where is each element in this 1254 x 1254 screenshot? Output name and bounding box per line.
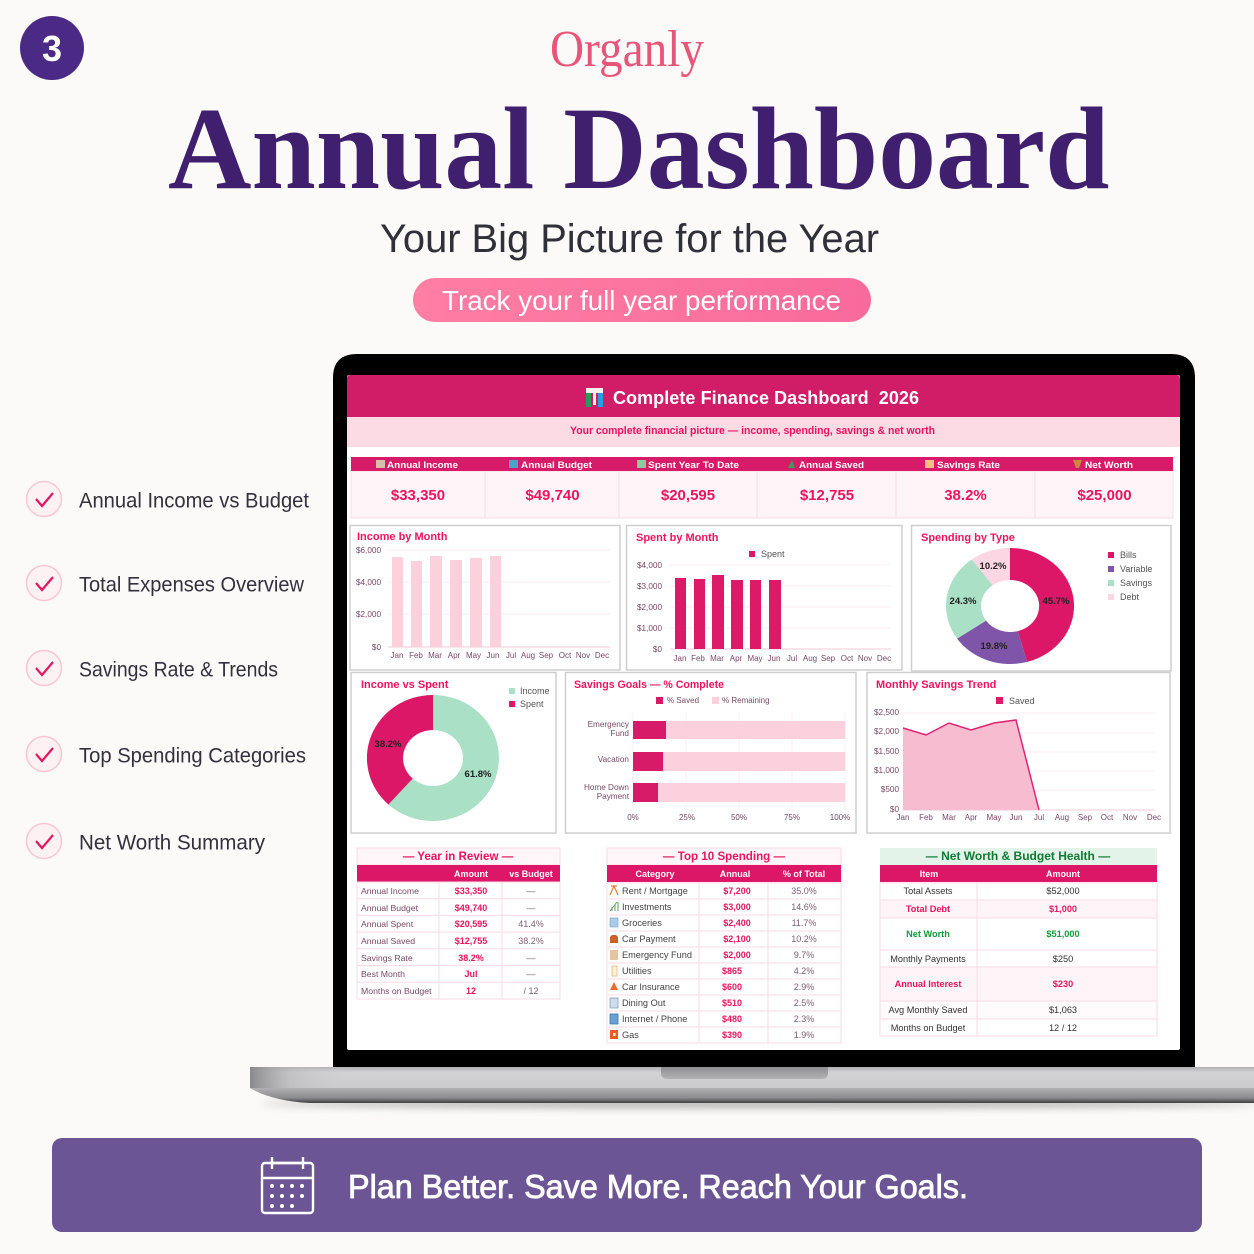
axis labels: Aug <box>803 654 817 663</box>
tagline pill <box>413 278 871 322</box>
laptop <box>250 354 1254 1108</box>
axis labels: $6,000 <box>356 546 381 555</box>
axis labels: Dec <box>1147 813 1161 822</box>
axis labels: Home Down <box>584 783 629 792</box>
table: net worth and budget health: Monthly Payments <box>890 954 966 964</box>
table: year in review: Best Month <box>361 969 405 979</box>
table: net worth and budget health: $52,000 <box>1046 886 1080 896</box>
table: top 10 spending <box>607 848 841 1043</box>
table: top 10 spending: $2,000 <box>723 950 751 960</box>
legend: Spent <box>520 699 544 709</box>
axis labels: Sep <box>539 651 554 660</box>
table: year in review: 12 <box>466 986 476 996</box>
panel: monthly savings trend: Monthly Savings Trend <box>876 679 996 691</box>
axis labels: $3,000 <box>637 582 662 591</box>
axis labels: Jan <box>897 813 909 822</box>
legend: Bills <box>1120 550 1137 560</box>
table: top 10 spending: 10.2% <box>791 934 817 944</box>
axis labels: $0 <box>653 645 662 654</box>
step number badge: 3 <box>42 28 62 69</box>
donut chart <box>367 695 499 821</box>
laptop base <box>250 1067 1254 1103</box>
table: top 10 spending: — Top 10 Spending — <box>663 850 785 863</box>
feature: net worth summary: Net Worth Summary <box>79 830 265 854</box>
table: top 10 spending: Internet / Phone <box>622 1014 687 1024</box>
table: year in review: — <box>526 953 536 963</box>
table: net worth and budget health: $1,063 <box>1049 1005 1077 1015</box>
KPI: annual budget: $49,740 <box>525 487 580 504</box>
axis labels: May <box>747 654 763 663</box>
axis labels: Nov <box>1123 813 1137 822</box>
axis labels: Jun <box>487 651 499 660</box>
table: top 10 spending: Gas <box>622 1030 639 1040</box>
legend <box>656 696 770 705</box>
legend <box>1108 550 1153 602</box>
table: year in review: Annual Saved <box>361 936 415 946</box>
panel: income by month <box>350 526 620 670</box>
table: top 10 spending: Car Insurance <box>622 982 680 992</box>
table: year in review: vs Budget <box>509 869 553 879</box>
table: net worth and budget health: $230 <box>1053 979 1073 989</box>
axis labels: Jan <box>391 651 403 660</box>
table: top 10 spending: Rent / Mortgage <box>622 886 688 896</box>
panel: monthly savings trend: Saved <box>1009 696 1035 706</box>
axis labels: 50% <box>731 813 747 822</box>
table: year in review: Savings Rate <box>361 953 413 963</box>
table: top 10 spending: $390 <box>722 1030 742 1040</box>
axis labels: $2,000 <box>874 727 899 736</box>
panel: income vs spent: Income vs Spent <box>361 679 449 691</box>
KPI: annual budget: Annual Budget <box>521 460 593 471</box>
donut chart <box>946 548 1074 664</box>
dashboard subtitle: Your complete financial picture — income, spending, savings & net worth <box>570 425 935 437</box>
axis labels: $1,000 <box>874 766 899 775</box>
panel: spent by month: Spent by Month <box>636 532 719 544</box>
axis labels: Oct <box>841 654 854 663</box>
bottom banner: Plan Better. Save More. Reach Your Goals. <box>348 1168 968 1205</box>
brand name: Organly <box>550 21 704 78</box>
title: Annual Dashboard <box>168 84 1109 214</box>
step number badge <box>20 16 84 80</box>
table: year in review: Annual Spent <box>361 919 414 929</box>
feature: top spending categories <box>26 736 306 772</box>
table: top 10 spending: 2.9% <box>794 982 814 992</box>
table: top 10 spending: Category <box>635 869 675 879</box>
legend: Savings <box>1120 578 1153 588</box>
table: net worth and budget health: Avg Monthly Saved <box>888 1005 968 1015</box>
table: year in review: $49,740 <box>455 903 487 913</box>
table: top 10 spending: 11.7% <box>792 918 816 928</box>
panel: spending by type: 10.2% <box>980 561 1007 572</box>
stacked bars <box>633 721 845 802</box>
axis labels: Oct <box>1101 813 1114 822</box>
axis labels: Aug <box>521 651 535 660</box>
panel: spending by type <box>912 526 1171 671</box>
legend: Debt <box>1120 592 1140 602</box>
axis labels: Fund <box>610 729 629 738</box>
icon: calendar <box>262 1157 313 1213</box>
table: top 10 spending: 9.7% <box>794 950 814 960</box>
table: top 10 spending: Investments <box>622 902 672 912</box>
KPI: annual saved: Annual Saved <box>799 460 864 471</box>
feature checklist <box>26 482 309 858</box>
axis labels: $1,000 <box>637 624 662 633</box>
table: net worth and budget health: $51,000 <box>1046 929 1080 939</box>
table: top 10 spending: Groceries <box>622 918 662 928</box>
axis labels: $4,000 <box>637 561 662 570</box>
panel: spending by type: 19.8% <box>981 641 1008 652</box>
axis labels: Vacation <box>598 755 629 764</box>
table: year in review: Annual Income <box>361 886 419 896</box>
KPI row <box>351 457 1173 518</box>
axis labels: Aug <box>1055 813 1069 822</box>
KPI: spent year to date: $20,595 <box>661 487 715 504</box>
table: year in review: — Year in Review — <box>403 850 514 863</box>
area chart <box>903 720 1039 810</box>
axis labels: Sep <box>821 654 836 663</box>
table: year in review: 38.2% <box>458 953 484 963</box>
panel: income vs spent: 38.2% <box>375 739 402 750</box>
legend: % Saved <box>667 696 699 705</box>
axis labels: May <box>466 651 481 660</box>
dashboard header <box>347 375 1180 417</box>
table: top 10 spending: Dining Out <box>622 998 666 1008</box>
panel: monthly savings trend <box>867 672 1170 833</box>
table: year in review: Months on Budget <box>361 986 432 996</box>
legend: Variable <box>1120 564 1152 574</box>
table: net worth and budget health: Total Assets <box>903 886 953 896</box>
axis labels: $1,500 <box>874 747 899 756</box>
table: year in review: 38.2% <box>518 936 544 946</box>
table: net worth and budget health: $250 <box>1053 954 1073 964</box>
axis labels: Jun <box>1010 813 1022 822</box>
table: year in review: $33,350 <box>455 886 487 896</box>
feature: total expenses overview: Total Expenses Overview <box>79 572 304 596</box>
axis labels: Oct <box>559 651 572 660</box>
axis labels: $4,000 <box>356 578 381 587</box>
table: top 10 spending: 35.0% <box>791 886 817 896</box>
dashboard subtitle <box>347 417 1180 447</box>
subtitle: Your Big Picture for the Year <box>380 217 879 261</box>
panel: spending by type: 45.7% <box>1043 596 1070 607</box>
KPI: savings rate: Savings Rate <box>937 460 1000 471</box>
table: top 10 spending: $510 <box>722 998 742 1008</box>
axis labels: Dec <box>595 651 609 660</box>
feature: annual income vs budget: Annual Income vs Budget <box>79 488 309 512</box>
table: top 10 spending: 4.2% <box>794 966 814 976</box>
table: top 10 spending: Utilities <box>622 966 652 976</box>
axis labels <box>874 708 1161 822</box>
KPI: annual saved <box>788 460 864 504</box>
axis labels: Nov <box>858 654 872 663</box>
KPI: net worth: $25,000 <box>1077 487 1132 504</box>
KPI: annual income: $33,350 <box>391 487 445 504</box>
table: top 10 spending: 14.6% <box>791 902 817 912</box>
table: top 10 spending: 1.9% <box>794 1030 814 1040</box>
table: year in review: Amount <box>454 869 488 879</box>
axis labels: Mar <box>428 651 442 660</box>
category icons <box>610 886 618 1039</box>
table: net worth and budget health: Total Debt <box>906 904 950 914</box>
axis labels <box>356 546 609 660</box>
table: net worth and budget health: Net Worth <box>906 929 950 939</box>
axis labels: Nov <box>576 651 590 660</box>
bars <box>675 575 781 649</box>
feature: savings rate and trends: Savings Rate & Trends <box>79 658 278 682</box>
axis labels: Dec <box>877 654 891 663</box>
table: net worth and budget health <box>880 848 1157 1036</box>
table: year in review: $20,595 <box>455 919 487 929</box>
KPI: savings rate <box>925 460 1000 504</box>
KPI: annual income: Annual Income <box>387 460 458 471</box>
axis labels: Feb <box>409 651 423 660</box>
table: top 10 spending: $480 <box>722 1014 742 1024</box>
table: net worth and budget health: Months on Budget <box>891 1023 966 1033</box>
axis labels: Sep <box>1078 813 1093 822</box>
KPI: spent year to date: Spent Year To Date <box>648 460 739 471</box>
axis labels <box>637 561 891 663</box>
panel: spent by month <box>626 526 902 670</box>
table: year in review <box>357 848 560 999</box>
axis labels <box>584 720 850 822</box>
feature: savings rate and trends <box>26 650 278 686</box>
axis labels: $500 <box>881 785 899 794</box>
KPI: annual saved: $12,755 <box>800 487 854 504</box>
panel: income by month: Income by Month <box>357 531 448 543</box>
table: top 10 spending: $600 <box>722 982 742 992</box>
table: year in review: — <box>526 886 536 896</box>
tagline pill: Track your full year performance <box>442 285 841 316</box>
table: year in review: $12,755 <box>455 936 487 946</box>
table: top 10 spending: $7,200 <box>723 886 751 896</box>
table: top 10 spending: Car Payment <box>622 934 676 944</box>
axis labels: Apr <box>448 651 461 660</box>
feature: annual income vs budget <box>26 482 309 516</box>
laptop lid <box>333 354 1195 1070</box>
axis labels: $0 <box>890 805 899 814</box>
axis labels: May <box>986 813 1002 822</box>
table: top 10 spending: Emergency Fund <box>622 950 692 960</box>
table: top 10 spending: $3,000 <box>723 902 751 912</box>
KPI: savings rate: 38.2% <box>944 487 987 504</box>
axis labels: Jun <box>768 654 780 663</box>
bars <box>392 556 501 647</box>
table: net worth and budget health: Annual Interest <box>895 979 961 989</box>
panel: savings goals <box>566 672 856 833</box>
table: net worth and budget health: Item <box>920 869 938 879</box>
table: top 10 spending: 2.5% <box>794 998 814 1008</box>
KPI: annual income <box>376 460 458 504</box>
legend: Income <box>520 686 550 696</box>
axis labels: Mar <box>942 813 956 822</box>
axis labels: $2,000 <box>637 603 662 612</box>
feature: net worth summary <box>26 824 265 858</box>
axis labels: 25% <box>679 813 695 822</box>
table: top 10 spending: Annual <box>720 869 750 879</box>
table: year in review: / 12 <box>523 986 539 996</box>
table: net worth and budget health: Amount <box>1046 869 1080 879</box>
table: year in review: — <box>526 969 536 979</box>
axis labels: 75% <box>784 813 800 822</box>
axis labels: Payment <box>597 792 630 801</box>
laptop shadow <box>260 1100 1254 1108</box>
axis labels: Emergency <box>588 720 630 729</box>
panel: spending by type: Spending by Type <box>921 532 1015 544</box>
panel: spending by type: 24.3% <box>950 596 977 607</box>
axis labels: $2,000 <box>356 610 381 619</box>
axis labels: Apr <box>730 654 743 663</box>
dashboard header: Complete Finance Dashboard 2026 <box>613 388 919 408</box>
table: top 10 spending: $2,100 <box>723 934 751 944</box>
axis labels: Feb <box>919 813 933 822</box>
panel: income vs spent: 61.8% <box>465 769 492 780</box>
table: net worth and budget health: $1,000 <box>1049 904 1077 914</box>
table: top 10 spending: $2,400 <box>723 918 751 928</box>
axis labels: $2,500 <box>874 708 899 717</box>
table: year in review: 41.4% <box>518 919 544 929</box>
axis labels: Feb <box>691 654 705 663</box>
table: year in review: Jul <box>464 969 478 979</box>
axis labels: Jul <box>1034 813 1044 822</box>
legend: % Remaining <box>722 696 770 705</box>
axis labels: 100% <box>830 813 850 822</box>
table: top 10 spending: $865 <box>722 966 742 976</box>
axis labels: Jul <box>506 651 516 660</box>
KPI: net worth <box>1073 460 1133 504</box>
legend <box>509 686 550 709</box>
bottom banner <box>52 1138 1202 1232</box>
icon: chart <box>586 388 603 407</box>
table: net worth and budget health: — Net Worth & Budget Health — <box>926 849 1110 863</box>
KPI: net worth: Net Worth <box>1085 460 1133 471</box>
axis labels: Mar <box>710 654 724 663</box>
KPI: annual budget <box>509 460 593 504</box>
table: top 10 spending: 2.3% <box>794 1014 814 1024</box>
axis labels: Jul <box>787 654 797 663</box>
panel: spent by month: Spent <box>761 549 785 559</box>
axis labels: Apr <box>965 813 978 822</box>
KPI: spent year to date <box>637 460 739 504</box>
panel: savings goals: Savings Goals — % Complete <box>574 679 724 691</box>
table: year in review: Annual Budget <box>361 903 419 913</box>
screen <box>347 375 1180 1050</box>
axis labels: $0 <box>372 643 381 652</box>
axis labels: Jan <box>674 654 686 663</box>
feature: top spending categories: Top Spending Categories <box>79 744 306 768</box>
panel: income vs spent <box>351 672 556 833</box>
table: net worth and budget health: 12 / 12 <box>1049 1023 1077 1033</box>
axis labels: 0% <box>627 813 639 822</box>
feature: total expenses overview <box>26 566 304 600</box>
table: top 10 spending: % of Total <box>783 869 825 879</box>
table: year in review: — <box>526 903 536 913</box>
